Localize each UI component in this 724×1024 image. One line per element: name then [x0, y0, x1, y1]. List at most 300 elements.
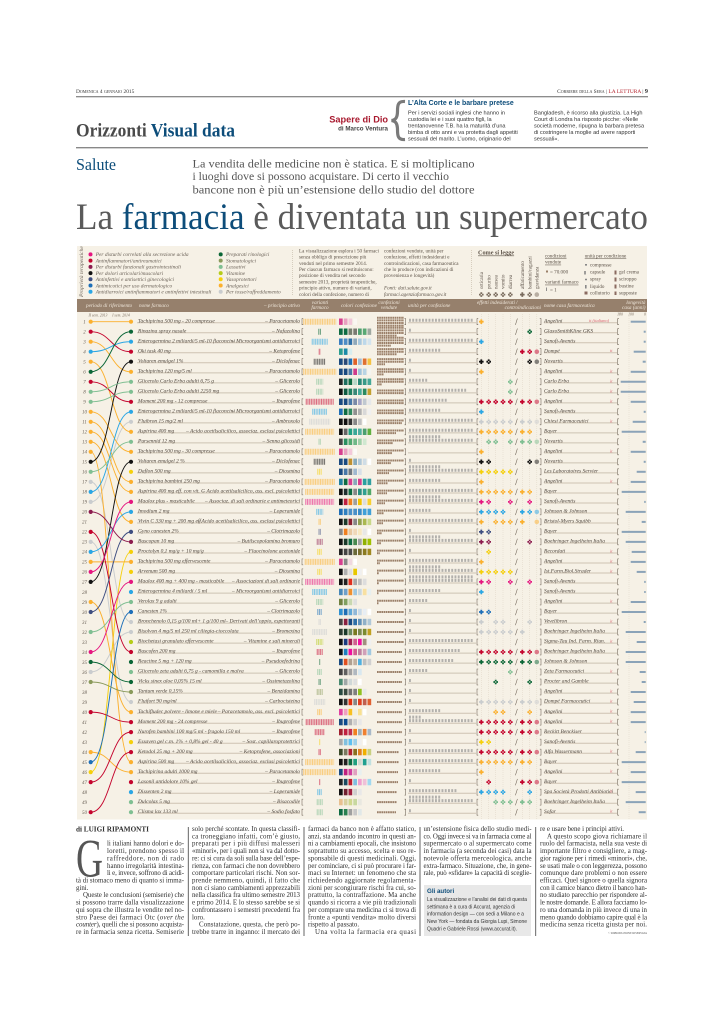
article text: column 3: quando si ricorra a vie più tradizionali [308, 900, 416, 907]
row 14: Tachipirina 500 mg 30 [129, 448, 646, 455]
article text: column 5: le nostre domande. E allora facciamo lo- [540, 900, 648, 907]
left rank column: numbers and dots: 6 [83, 371, 86, 376]
left rank column: numbers and dots: 7 [83, 381, 86, 386]
article text: column 1: hanno irregolarità intestina- [107, 863, 185, 870]
article text: column 2: Constatazione, questa, che però po- [199, 922, 301, 929]
row 4: Oki task: – Ketoprofene [268, 347, 301, 354]
left rank column: numbers and dots: 26 [82, 571, 88, 576]
row 4: Oki task: Dompé [543, 348, 560, 354]
article text: column 5: A questo scopo giova richiamare il [547, 833, 647, 840]
left rank column: numbers and dots: 41 [82, 721, 87, 726]
header band: vendute [381, 305, 398, 311]
row 31: Bronchenolo [129, 618, 646, 625]
row 8: Glicerolo 2250 mg: it [610, 388, 613, 393]
row 8: Glicerolo 2250 mg [129, 388, 646, 395]
legend: proprietà terapeutiche: Preparati rinologici [225, 252, 270, 258]
row 35: Reactine: Reactine 5 mg + 120 mg [137, 659, 192, 665]
how to read legend: compresse [590, 262, 612, 268]
kicker: Salute: Salute [76, 155, 116, 174]
legend: proprietà terapeutiche: Antimicotici per uso dermatologico [95, 283, 173, 289]
legend: proprietà terapeutiche: Stomatologici [226, 258, 256, 264]
row 5: Voltaren emulgel [129, 357, 646, 365]
row 36: Glicerolo zeta: Zeta Farmaceutici [544, 669, 585, 675]
row 50: Clisma lax: Sofar [544, 808, 557, 815]
article text: column 1: stro Paese dei farmaci Otc (over the [76, 914, 184, 921]
row 17: Tachipirina bambini: Tachipirina bambini 250 mg [138, 479, 200, 485]
row 16: Daflon [129, 467, 646, 475]
article text: column 2: e primo 2014. E lo stesso sarebbe se si [192, 900, 300, 907]
legend: proprietà terapeutiche: Analgesici [225, 283, 249, 289]
article text: column 1: li italiani hanno dolori e do- [107, 841, 185, 848]
how to read legend: unità per condizione [585, 254, 627, 260]
left rank column: numbers and dots: 27 [82, 581, 88, 586]
standfirst: La vendita delle medicine non è statica. E si moltiplicano [192, 157, 475, 170]
row 39: Fluifort: – Carbocisteina [264, 699, 300, 705]
left rank column: numbers and dots: 31 [82, 621, 87, 626]
row 1: Tachipirina 500 mg: Tachipirina 500 mg - 20 compresse [138, 318, 215, 324]
sub header: periods and longevity scale: 0 [644, 312, 646, 316]
row 24: Proctolyn: – Fluocinolone acetonide [243, 549, 301, 555]
row 38: Tantum verde: – Benzidamina [267, 689, 300, 695]
article text: column 1: raffreddore, non di rado [107, 855, 185, 862]
header band [77, 299, 647, 312]
header band: varianti [312, 300, 329, 306]
row 4: Oki task: it [610, 348, 613, 353]
row 24: Proctolyn: it [610, 548, 613, 553]
how to read legend: gel crema [619, 270, 640, 276]
article text: column 5: se usati male o con leggerezza, possono [540, 863, 648, 870]
column: Sapere di Dio: L’Alta Corte e le barbare pretese [408, 100, 514, 107]
row 48: Dissenten: Dissenten 2 mg [137, 789, 172, 795]
legend: proprietà terapeutiche: Per disturbi correlati alla secrezione acida [95, 252, 189, 258]
row 3: Enterogermina: – Microorganismi antidiarroici [231, 338, 300, 344]
row 27: Maalox 400 [129, 577, 646, 585]
row 15: Voltaren emulgel 2%: Novartis [543, 458, 563, 464]
row 44: Ketodol [129, 748, 646, 755]
article text: column 2: confrontassero i semestri precedenti fra [192, 907, 300, 914]
header band: – principio attivo [263, 303, 300, 309]
standfirst: bancone non è più un’estensione dello studio del dottore [192, 183, 474, 196]
article text: column 5: gior ragione per i rimedi «minori», che, [540, 855, 647, 862]
sub header: periods and longevity scale: 100 [628, 312, 634, 316]
row 12: Aspirina 400 mg [129, 428, 646, 435]
row 32: Bisolvon: Bisolvon 4 mg/5 ml 250 ml ciliegia-cioccolata [138, 628, 239, 635]
how to read legend: bustine [619, 283, 634, 289]
left rank column: numbers and dots: 30 [82, 611, 88, 616]
row 26: Arvenum [129, 567, 646, 575]
row 15: Voltaren emulgel 2%: Voltaren emulgel 2 % [138, 458, 185, 464]
row 25: Tachipirina effervescente: it [610, 558, 613, 563]
row 40: Tachifludec: – Paracetamolo, ass. escl. psicolettici [217, 709, 300, 715]
row 33: Biochetasi: it [610, 638, 613, 644]
row 44: Ketodol: Alfa Wassermann [543, 748, 582, 755]
how to read legend: = 1 [550, 288, 557, 294]
header band: controindicazioni [505, 305, 542, 311]
row 38: Tantum verde: it [610, 688, 613, 694]
row 13: Pursennid: Pursennid 12 mg [137, 438, 175, 444]
row 19: Maalox plus [129, 497, 646, 505]
icon: brace [392, 101, 405, 140]
row 36: Glicerolo zeta: Glicerolo zeta adulti 6,75 g - camomilla e malva [138, 669, 244, 675]
left rank column: numbers and dots: 38 [82, 691, 88, 696]
row 8: Glicerolo 2250 mg: – Glicerolo [274, 388, 300, 394]
how to read legend: sciroppo [619, 276, 637, 282]
article text: column 2: «minori», per i quali non si va dal dotto- [192, 848, 301, 855]
row 14: Tachipirina 500 mg 30: – Paracetamolo [264, 448, 300, 454]
guide lines [481, 314, 629, 819]
row 26: Arvenum: – Diosmina [274, 569, 300, 575]
masthead: Domenica 4 gennaio 2015 [76, 89, 135, 95]
text block: description: confezione, effetti indesiderati e [384, 254, 450, 261]
row 9: Moment 200 mg: Angelini [543, 398, 563, 404]
row 42: Nurofen bambini: Reckitt Benckiser [543, 729, 583, 735]
masthead: Corriere della Sera | LA LETTURA | 9 [557, 88, 649, 95]
row 45: Aspirina 500: – Acido acetilsalicilico, associaz. esclusi psicolettici [185, 759, 300, 765]
row 2: Rinazina [129, 327, 646, 336]
article text: column 4: in farmacia (a seconda dei casi) data la [424, 848, 532, 855]
row 10: Enterogermina: Sanofi-Aventis [544, 407, 575, 414]
row 3: Enterogermina: Enterogermina 2 miliardi/5 ml-10 flaconcini [137, 337, 235, 344]
row 35: Reactine [129, 658, 646, 665]
how to read legend: gravidanza [534, 266, 540, 289]
row 7: Glicerolo Carlo Erba: Glicerolo Carlo Erba adulti 6,75 g [138, 378, 214, 384]
text block: description: che lo produce (con indicazioni di [384, 266, 454, 273]
row 36: Glicerolo zeta [129, 668, 646, 675]
row 43: Essaven: Sanofi-Aventis [544, 738, 575, 745]
article text: column 1: counter), quelli che si possono acquista- [76, 922, 185, 929]
article text: column 2: rienza, con farmaci che non dovrebbero [192, 863, 301, 870]
box: Gli autori: La visualizzazione e l’analisi dei dati di questa [427, 897, 528, 903]
article text: column 4: rale, può «sfidare» la capacità di sceglie- [424, 870, 532, 877]
article text: column 5: © RIPRODUZIONE RISERVATA [608, 932, 647, 935]
row 11: Fluibron: – Ambroxolo [271, 418, 300, 424]
row 46: Tachipirina adulti [129, 769, 646, 775]
rule [76, 147, 648, 149]
column: Sapere di Dio: sessuali». [534, 136, 559, 142]
row 7: Glicerolo Carlo Erba: Carlo Erba [544, 378, 569, 384]
column: Sapere di Dio: Bangladesh, è ricorso alla giustizia. La High [534, 110, 643, 116]
row 6: Tachipirina 120 mg: – Paracetamolo [264, 368, 300, 374]
article text: column 5 [540, 826, 648, 935]
row 42: Nurofen bambini: Nurofen bambini 100 mg/5 ml - fragola 150 ml [137, 728, 241, 735]
article text: column 3: per comprare una medicina ci si trova di [308, 907, 416, 914]
how to read legend: bambini/ragazzi [527, 256, 533, 289]
row 28: Enterogermina 4 miliardi: Enterogermina 4 miliardi / 5 ml [137, 588, 208, 595]
article text: column 3: sponsabile di questi medicinali. Oggi, [308, 855, 416, 862]
row 37: Vicks: Procter and Gamble [543, 679, 589, 685]
sub header: periods and longevity scale: I sem. 2014 [111, 313, 130, 317]
article text: column 2: trebbe trarre in inganno: il mercato dei [192, 929, 300, 936]
row 23: Buscopan: – Butilscopolamina bromuro [237, 539, 300, 545]
row 44: Ketodol: it [610, 749, 613, 754]
row 35: Reactine: Johnson & Johnson [544, 659, 587, 665]
row 38: Tantum verde [129, 688, 646, 695]
row 27: Maalox 400: Sanofi-Aventis [544, 578, 575, 585]
header band: unità per confezione [408, 302, 451, 309]
left rank column: numbers and dots: 50 [82, 811, 88, 816]
row 9: Moment 200 mg [129, 398, 646, 405]
row 20: Imodium [129, 509, 646, 515]
row 48: Dissenten: it [610, 789, 613, 794]
row 44: Ketodol: Ketodol 25 mg + 200 mg [137, 749, 193, 755]
row 9: Moment 200 mg: – Ibuprofene [271, 397, 301, 404]
row 17: Tachipirina bambini: it [610, 478, 613, 483]
row 6: Tachipirina 120 mg: it [610, 368, 613, 373]
legend: proprietà terapeutiche: Lassativi [225, 265, 246, 271]
left rank column: numbers and dots: 9 [83, 401, 86, 406]
row 7: Glicerolo Carlo Erba [129, 378, 646, 385]
article text: column 3: ni a cambiamenti epocali, che insistono [308, 841, 417, 848]
article text: column 3: anzi, sta andando incontro in questi an- [308, 833, 417, 840]
how to read legend: collutorio [590, 291, 610, 297]
article text: column 3: rispetto al passato. [308, 922, 359, 929]
row 33: Biochetasi [129, 638, 646, 645]
column: Sapere di Dio: Per i servizi sociali inglesi che hanno in [408, 110, 505, 116]
box: Gli autori: Quadri e Gabriele Rossi (www.accurat.it). [427, 927, 517, 933]
row 26: Arvenum: it [610, 568, 613, 573]
row 25: Tachipirina effervescente [129, 558, 646, 565]
article text: column 2: non ci siano cambiamenti apprezzabili [192, 885, 300, 892]
row 11: Fluibron [129, 418, 646, 425]
row 29: Verolax [129, 598, 646, 605]
row 22: Gyno canesten: Gyno canesten 2% [138, 529, 179, 535]
article text: column 5: importante filtro e consigliere, a mag- [540, 848, 648, 855]
left rank column: numbers and dots: 15 [82, 461, 88, 466]
row 10: Enterogermina [129, 408, 646, 415]
row 41: Moment 24: Angelini [543, 719, 563, 725]
article text: column 3: richiedendo aggiornate regolamenta- [308, 878, 417, 884]
article text: column 5: re e usare bene i principi attivi. [540, 826, 624, 833]
row 21: Vivin C: Bristol-Myers Squibb [544, 519, 591, 525]
row 43: Essaven: – Sost. capillaroprotettrici [242, 739, 300, 745]
box: Gli autori: Gli autori [427, 888, 454, 895]
article text: column 3 [308, 826, 417, 936]
row 46: Tachipirina adulti: Angelini [543, 769, 563, 775]
article text: column 4: supermercato o al supermercato come [424, 841, 532, 848]
drop cap: G [76, 829, 103, 889]
row 38: Tantum verde: Angelini [543, 689, 563, 695]
sub header: periods and longevity scale [88, 312, 646, 317]
row 17: Tachipirina bambini: – Paracetamolo [264, 479, 300, 485]
row 36: Glicerolo zeta: it [610, 668, 613, 674]
article text: column 2: ca troneggiano infatti, com’è giusto, [192, 833, 300, 840]
row 1: Tachipirina 500 mg: it (italiano) [589, 318, 610, 323]
row 40: Tachifludec: Tachifludec polvere - limone e miele [138, 708, 217, 715]
left rank column: numbers and dots: 16 [82, 471, 88, 476]
medicine rows [129, 318, 646, 815]
article text: column 4: extra-farmaco. Situazione, che, in gene- [424, 863, 532, 870]
article text: column 3: soprattutto su accesso, scelta e uso re- [308, 848, 417, 855]
legend: proprietà terapeutiche: Vasoprotettori [226, 277, 257, 283]
article text: column 1 [76, 826, 185, 936]
row 20: Imodium: – Loperamide [269, 509, 301, 515]
row 24: Proctolyn [129, 548, 646, 555]
row 10: Enterogermina: – Microorganismi antidiarroici [231, 408, 300, 414]
row 32: Bisolvon [129, 628, 646, 635]
article text: column 1: di LUIGI RIPAMONTI [76, 826, 149, 834]
row 18: Aspirina eff [129, 488, 646, 495]
row 50: Clisma lax: Clisma lax 133 ml [138, 809, 178, 815]
row 14: Tachipirina 500 mg 30: it [610, 448, 613, 453]
row 33: Biochetasi: Biochetasi granulato effervescente [138, 638, 214, 645]
article text: column 2: re: ci si cura da soli sulla base dell’espe- [192, 855, 301, 862]
row 27: Maalox 400: Maalox 400 mg + 400 mg - masticabile [137, 578, 225, 585]
rank connections (bump chart) [91, 322, 131, 812]
row 22: Gyno canesten: – Clotrimazolo [266, 529, 300, 535]
article text: column 5: ruolo del farmacista, nella sua veste di [540, 841, 647, 848]
row 23: Buscopan: Buscopan 10 mg [138, 539, 175, 545]
article text: column 1: Queste le conclusioni (semiserie) che [83, 892, 184, 899]
row 32: Bisolvon: Boehringer Ingelheim Italia [544, 629, 605, 635]
row 42: Nurofen bambini [129, 728, 646, 735]
left rank column: numbers and dots: 1 [83, 320, 86, 326]
left rank column: numbers and dots: 5 [83, 360, 86, 366]
row 29: Verolax: it [610, 598, 613, 604]
row 38: Tantum verde: Tantum verde 0,15% [138, 689, 183, 695]
left rank column: numbers and dots: 35 [82, 661, 88, 666]
row 21: Vivin C: Vivin C 330 mg + 200 mg eff. [138, 518, 202, 525]
header band: colori confezione [341, 302, 378, 309]
header band: longevità [626, 300, 646, 306]
header band: nome farmaco [139, 302, 169, 309]
how to read legend: condizioni [545, 254, 567, 260]
row 34: Buscofen: Buscofen 200 mg [138, 648, 176, 655]
column: Sapere di Dio: di costringere la moglie ad avere rapporti [534, 130, 635, 136]
legend: proprietà terapeutiche [79, 246, 281, 298]
row 29: Verolax: Verolax 9 g adulti [138, 599, 177, 605]
header band: confezioni [378, 299, 400, 306]
row 48: Dissenten: – Loperamide [269, 789, 301, 795]
text block: description: Fonti: dati.salute.gov.it [383, 286, 432, 292]
row 6: Tachipirina 120 mg: Angelini [543, 368, 563, 374]
row 35: Reactine: – Pseudoefedrina [261, 658, 300, 665]
left rank column: numbers and dots: 45 [82, 761, 88, 766]
row 33: Biochetasi: – Vitamine e sali minerali [243, 639, 300, 645]
row 31: Bronchenolo: it [610, 618, 613, 624]
article text: column 1: gini. [76, 885, 89, 892]
article text: column 3: Una volta la farmacia era quasi [315, 929, 416, 936]
header band: nome casa farmaceutica [544, 302, 595, 309]
column: Sapere di Dio: custodia lei e i suoi quattro figli, la [408, 117, 493, 123]
row 30: Canesten: Canesten 1% [138, 609, 167, 615]
left rank column: numbers and dots: 36 [82, 671, 88, 676]
row 25: Tachipirina effervescente: Tachipirina 500 mg effervescente [138, 558, 211, 565]
article text: column 1: loretti, prendono spesso il [107, 848, 184, 855]
how to read legend: nausea [493, 274, 499, 289]
standfirst [192, 157, 475, 196]
left rank column: numbers and dots: 46 [82, 771, 88, 776]
article text: column 3: maci su Internet: un fenomeno che sta [308, 870, 416, 877]
row 25: Tachipirina effervescente: – Paracetamolo [264, 559, 300, 565]
text block: description: posizione di vendita nel secondo [299, 273, 366, 279]
article text: column 2: preparati per i più diffusi malesseri [192, 841, 300, 848]
row 10: Enterogermina: Enterogermina 2 miliardi/5 ml-10 flaconcini [137, 407, 235, 414]
how to read legend: supposte [619, 290, 638, 296]
row 19: Maalox plus: Maalox plus - masticabile [137, 499, 195, 505]
header band: farmaco [311, 304, 329, 311]
column dividers [188, 827, 536, 936]
row 45: Aspirina 500 [129, 759, 646, 765]
row 22: Gyno canesten [129, 529, 646, 535]
header band: casa (anni) [622, 304, 646, 311]
left rank column: numbers and dots: 19 [82, 501, 88, 506]
row 30: Canesten [129, 609, 646, 615]
row 14: Tachipirina 500 mg 30: Tachipirina 500 mg - 30 compresse [138, 448, 215, 454]
row 26: Arvenum: Arvenum 500 mg [137, 569, 175, 575]
header band: periodo di riferimento [85, 302, 133, 309]
text block: description: confezioni vendute, unità per [384, 248, 444, 254]
row 8: Glicerolo 2250 mg: Glicerolo Carlo Erba adulti 2250 mg [138, 388, 219, 394]
row 31: Bronchenolo: – Derivati dell’oppio, espettoranti [224, 619, 300, 625]
how to read legend: prurito [486, 275, 492, 289]
row 41: Moment 24: Moment 200 mg - 24 compresse [137, 718, 208, 725]
row 24: Proctolyn: Recordati [543, 549, 566, 555]
row 49: Dulcolax: – Bisacodile [272, 799, 301, 805]
row 29: Verolax: Angelini [543, 599, 563, 605]
left rank column: numbers and dots: 13 [82, 441, 88, 446]
legend: proprietà terapeutiche: Per tosse/raffreddamento [225, 289, 281, 296]
row 16: Daflon: – Diosmina [274, 468, 300, 474]
left rank column: numbers and dots: 32 [82, 631, 88, 636]
left rank column: numbers and dots: 42 [82, 731, 88, 736]
left rank column: numbers and dots: 21 [82, 521, 87, 526]
row 43: Essaven [129, 738, 646, 745]
left rank column: numbers and dots: 24 [82, 551, 88, 556]
row 37: Vicks: Vicks sinex aloe 0,05% 15 ml [138, 679, 202, 685]
article text: column 2: prende nemmeno, quindi, il fatto che [192, 878, 300, 884]
left rank column: numbers and dots: 2 [83, 330, 86, 336]
row 21: Vivin C: – Acido acetilsalicilico, ass. esclusi psicolettici [197, 519, 300, 525]
row 40: Tachifludec [129, 708, 646, 715]
legend: proprietà terapeutiche: Per disturbi funzionali gastrointestinali [95, 264, 182, 271]
row 48: Dissenten [129, 789, 646, 795]
left rank column: numbers and dots: 8 [83, 391, 86, 396]
how to read legend: Come si legge [478, 250, 514, 256]
article text: column 3: per cominciare, ci si può procurare i far- [308, 863, 417, 870]
row 39: Fluifort [129, 698, 646, 705]
row 5: Voltaren emulgel: Novartis [543, 358, 563, 364]
text block: description: senza obbligo di prescrizione più [299, 255, 367, 261]
row 23: Buscopan: Boehringer Ingelheim Italia [544, 539, 605, 545]
left rank column: numbers and dots: 29 [82, 601, 88, 606]
column: Sapere di Dio: società moderne, ripugna la barbara pretesa [534, 124, 645, 130]
article text: column 5: meno quando dobbiamo capire qual è la [540, 914, 647, 921]
row 24: Proctolyn: Proctolyn 0,1 mg/g + 10 mg/g [137, 549, 204, 555]
row 21: Vivin C [129, 518, 646, 525]
text block: description: farmaci.agenziafarmaco.gov.it [384, 291, 447, 298]
left rank column: numbers and dots: 28 [82, 591, 88, 596]
left rank column: numbers and dots: 12 [82, 431, 88, 436]
row 11: Fluibron: Fluibron 15 mg/2 ml [137, 418, 183, 424]
article text: column 3: farmaci da banco non è affatto statico, [308, 826, 416, 833]
row 12: Aspirina 400 mg: Bayer [544, 428, 558, 434]
text block: description: Per ciascun farmaco si restituiscono: [299, 266, 374, 273]
how to read legend: orticaria [479, 271, 485, 289]
row 18: Aspirina eff: Bayer [544, 489, 558, 495]
row 28: Enterogermina 4 miliardi: – Microorganismi antidiarroici [231, 589, 300, 595]
box: Gli autori: information design — con sedi a Milano e a [427, 912, 525, 918]
article text: column 1: si possono trarre dalla visualizzazione [76, 900, 184, 907]
how to read legend: affaticamento [519, 261, 526, 289]
row 9: Moment 200 mg: it [610, 398, 613, 403]
row 45: Aspirina 500: Aspirina 500 mg [137, 759, 175, 765]
text block: description [293, 248, 471, 298]
row 26: Arvenum: Ist.Farm.Biol.Strader [543, 569, 592, 575]
row 12: Aspirina 400 mg: Aspirina 400 mg [137, 427, 175, 434]
row 13: Pursennid [129, 437, 646, 445]
row 6: Tachipirina 120 mg [129, 368, 646, 375]
row 47: Lasonil: Lasonil antidolore 10% gel [137, 779, 198, 785]
